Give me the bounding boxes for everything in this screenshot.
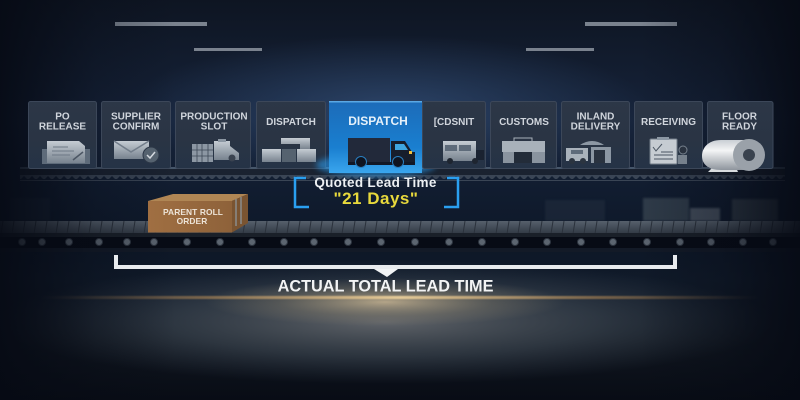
quoted lead time callout: "21 Days" bbox=[334, 189, 418, 208]
ceiling lights bbox=[115, 22, 677, 51]
step: PO release: RELEASE bbox=[39, 122, 86, 132]
icon: crates bbox=[262, 138, 316, 162]
icon: document bbox=[42, 141, 90, 164]
step: floor ready: FLOOR bbox=[722, 112, 758, 122]
step: production slot: SLOT bbox=[201, 122, 227, 132]
step: floor ready: READY bbox=[722, 122, 757, 132]
quoted lead time callout: Quoted Lead Time bbox=[314, 175, 437, 190]
step: garbled label bbox=[422, 102, 486, 168]
step: supplier confirm bbox=[102, 102, 170, 168]
step: floor ready bbox=[702, 102, 773, 172]
actual total lead time label: ACTUAL TOTAL LEAD TIME bbox=[278, 278, 494, 296]
step: receiving bbox=[634, 102, 702, 168]
icon: truck and depot bbox=[566, 141, 611, 164]
parent roll order box: PARENT ROLL bbox=[163, 207, 223, 217]
step: garbled label: [CDSNIT bbox=[434, 117, 474, 128]
step: dispatch highlighted bbox=[316, 101, 436, 177]
parent roll order box bbox=[148, 194, 248, 232]
step: dispatch highlighted: DISPATCH bbox=[348, 114, 408, 128]
step: receiving: RECEIVING bbox=[641, 117, 696, 128]
step: customs: CUSTOMS bbox=[499, 117, 549, 128]
step: customs bbox=[490, 102, 556, 168]
upper conveyor rail bbox=[20, 167, 785, 181]
rollers bbox=[18, 238, 776, 246]
step: dispatch: DISPATCH bbox=[266, 117, 316, 128]
icon: envelope with check bbox=[114, 141, 159, 163]
step: inland delivery bbox=[562, 102, 630, 168]
lower conveyor bbox=[0, 221, 800, 252]
icon: grid and truck bbox=[192, 139, 239, 162]
step: supplier confirm: CONFIRM bbox=[113, 122, 159, 132]
step: production slot: PRODUCTION bbox=[180, 112, 248, 122]
step: PO release bbox=[28, 102, 96, 168]
quoted lead time callout bbox=[295, 175, 458, 208]
step: production slot bbox=[176, 102, 250, 168]
icon: customs building bbox=[502, 138, 545, 163]
icon: clipboard bbox=[650, 137, 687, 164]
process steps bbox=[28, 101, 773, 177]
floor light streak bbox=[0, 296, 800, 299]
step: dispatch bbox=[256, 102, 326, 168]
step: inland delivery: INLAND bbox=[577, 112, 614, 122]
actual total lead time bracket bbox=[116, 255, 675, 277]
parent roll order box: ORDER bbox=[177, 216, 207, 226]
icon: paper roll bbox=[702, 139, 765, 172]
icon: black truck bbox=[348, 138, 415, 168]
icon: van bbox=[443, 141, 484, 164]
step: supplier confirm: SUPPLIER bbox=[111, 112, 162, 122]
step: inland delivery: DELIVERY bbox=[571, 122, 621, 132]
step: PO release: PO bbox=[55, 112, 70, 122]
